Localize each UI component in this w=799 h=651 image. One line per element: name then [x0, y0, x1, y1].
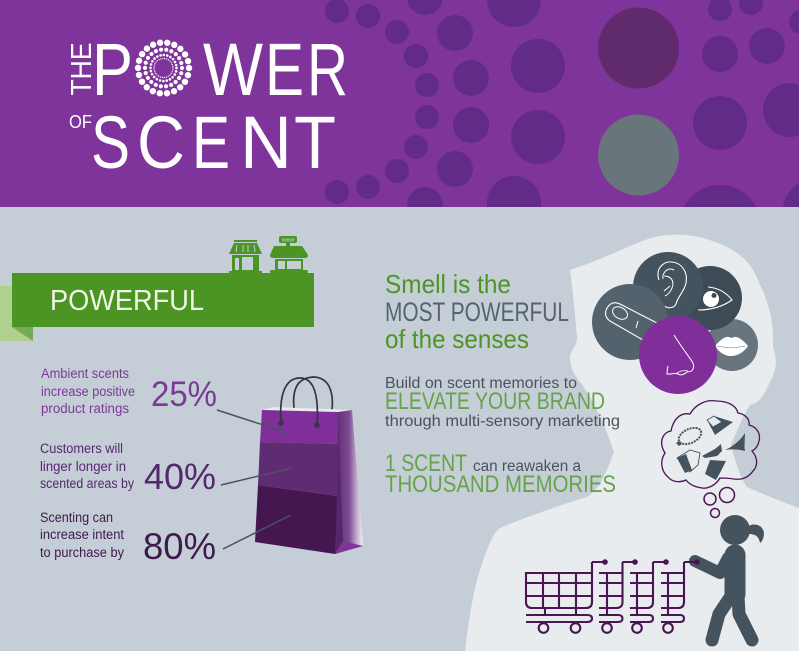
- title: C: [137, 101, 185, 184]
- stat: 80 percent: Scenting can: [40, 510, 113, 525]
- stat: 40 percent: [40, 441, 216, 497]
- title: N: [240, 101, 292, 184]
- icon: left shop: [229, 240, 262, 273]
- title: E: [192, 101, 230, 184]
- stat: 40 percent: scented areas by: [40, 476, 134, 491]
- senses cluster: [592, 252, 758, 394]
- text block: brand: ELEVATE YOUR BRAND: [385, 388, 605, 415]
- stat: 80 percent: [40, 510, 216, 567]
- shopping bag: [255, 377, 363, 554]
- stat: 25 percent: product ratings: [41, 401, 129, 416]
- head and shoulders silhouette: [465, 235, 799, 651]
- title: R: [307, 28, 348, 111]
- icon: finger: [592, 284, 668, 360]
- text block: memories: THOUSAND MEMORIES: [385, 471, 616, 498]
- title: OF: [69, 112, 92, 132]
- title: P: [92, 28, 133, 111]
- banner heading: POWERFUL: [50, 285, 204, 317]
- header band: [0, 0, 799, 267]
- title: THE: [66, 42, 98, 96]
- text block: brand: [385, 375, 620, 430]
- stat: 40 percent: Customers will: [40, 441, 123, 456]
- icon: right shop: SHOP: [282, 238, 294, 242]
- title: W: [203, 28, 263, 111]
- text block: smell heading: of the senses: [385, 324, 529, 354]
- stat: 25 percent: 25%: [151, 375, 217, 414]
- cart 2: [599, 559, 638, 633]
- icon: right shop: [270, 236, 308, 273]
- stat: 25 percent: Ambient scents: [41, 366, 129, 381]
- person with ponytail: [695, 515, 764, 640]
- icon: ear: [633, 252, 703, 322]
- stat: 80 percent: increase intent: [40, 527, 124, 542]
- title: [66, 28, 348, 184]
- thought bubbles: [704, 488, 734, 518]
- text block: smell heading: [385, 269, 569, 354]
- stat: 80 percent: to purchase by: [40, 545, 124, 560]
- text block: brand: through multi-sensory marketing: [385, 413, 620, 430]
- shopping carts: [526, 559, 700, 633]
- text block: brand: Build on scent memories to: [385, 375, 577, 392]
- icon: nose: [639, 316, 717, 394]
- text block: memories: can reawaken a: [473, 458, 581, 475]
- panel: powerful banner: [0, 273, 314, 341]
- title: T: [294, 101, 336, 184]
- icon: lips: [706, 319, 758, 371]
- cart 3: [630, 559, 669, 633]
- text block: memories: [385, 450, 616, 498]
- icon: dotted scent circle: [138, 42, 189, 94]
- text block: memories: 1 SCENT: [385, 450, 467, 477]
- background: [0, 207, 799, 651]
- icon: eye: [678, 266, 742, 330]
- stat: 80 percent: 80%: [143, 526, 216, 567]
- title: S: [91, 101, 130, 184]
- title: E: [265, 28, 304, 111]
- leader lines: [217, 410, 292, 549]
- text block: smell heading: MOST POWERFUL: [385, 297, 569, 327]
- cart 1: [526, 559, 608, 633]
- text block: smell heading: Smell is the: [385, 269, 511, 299]
- stat: 25 percent: increase positive: [41, 384, 135, 399]
- stat: 40 percent: linger longer in: [40, 459, 126, 474]
- stat: 25 percent: [41, 366, 217, 416]
- thought cloud: [662, 401, 760, 488]
- stat: 40 percent: 40%: [144, 456, 216, 497]
- thought items: [676, 416, 745, 480]
- cart 4: [661, 559, 700, 633]
